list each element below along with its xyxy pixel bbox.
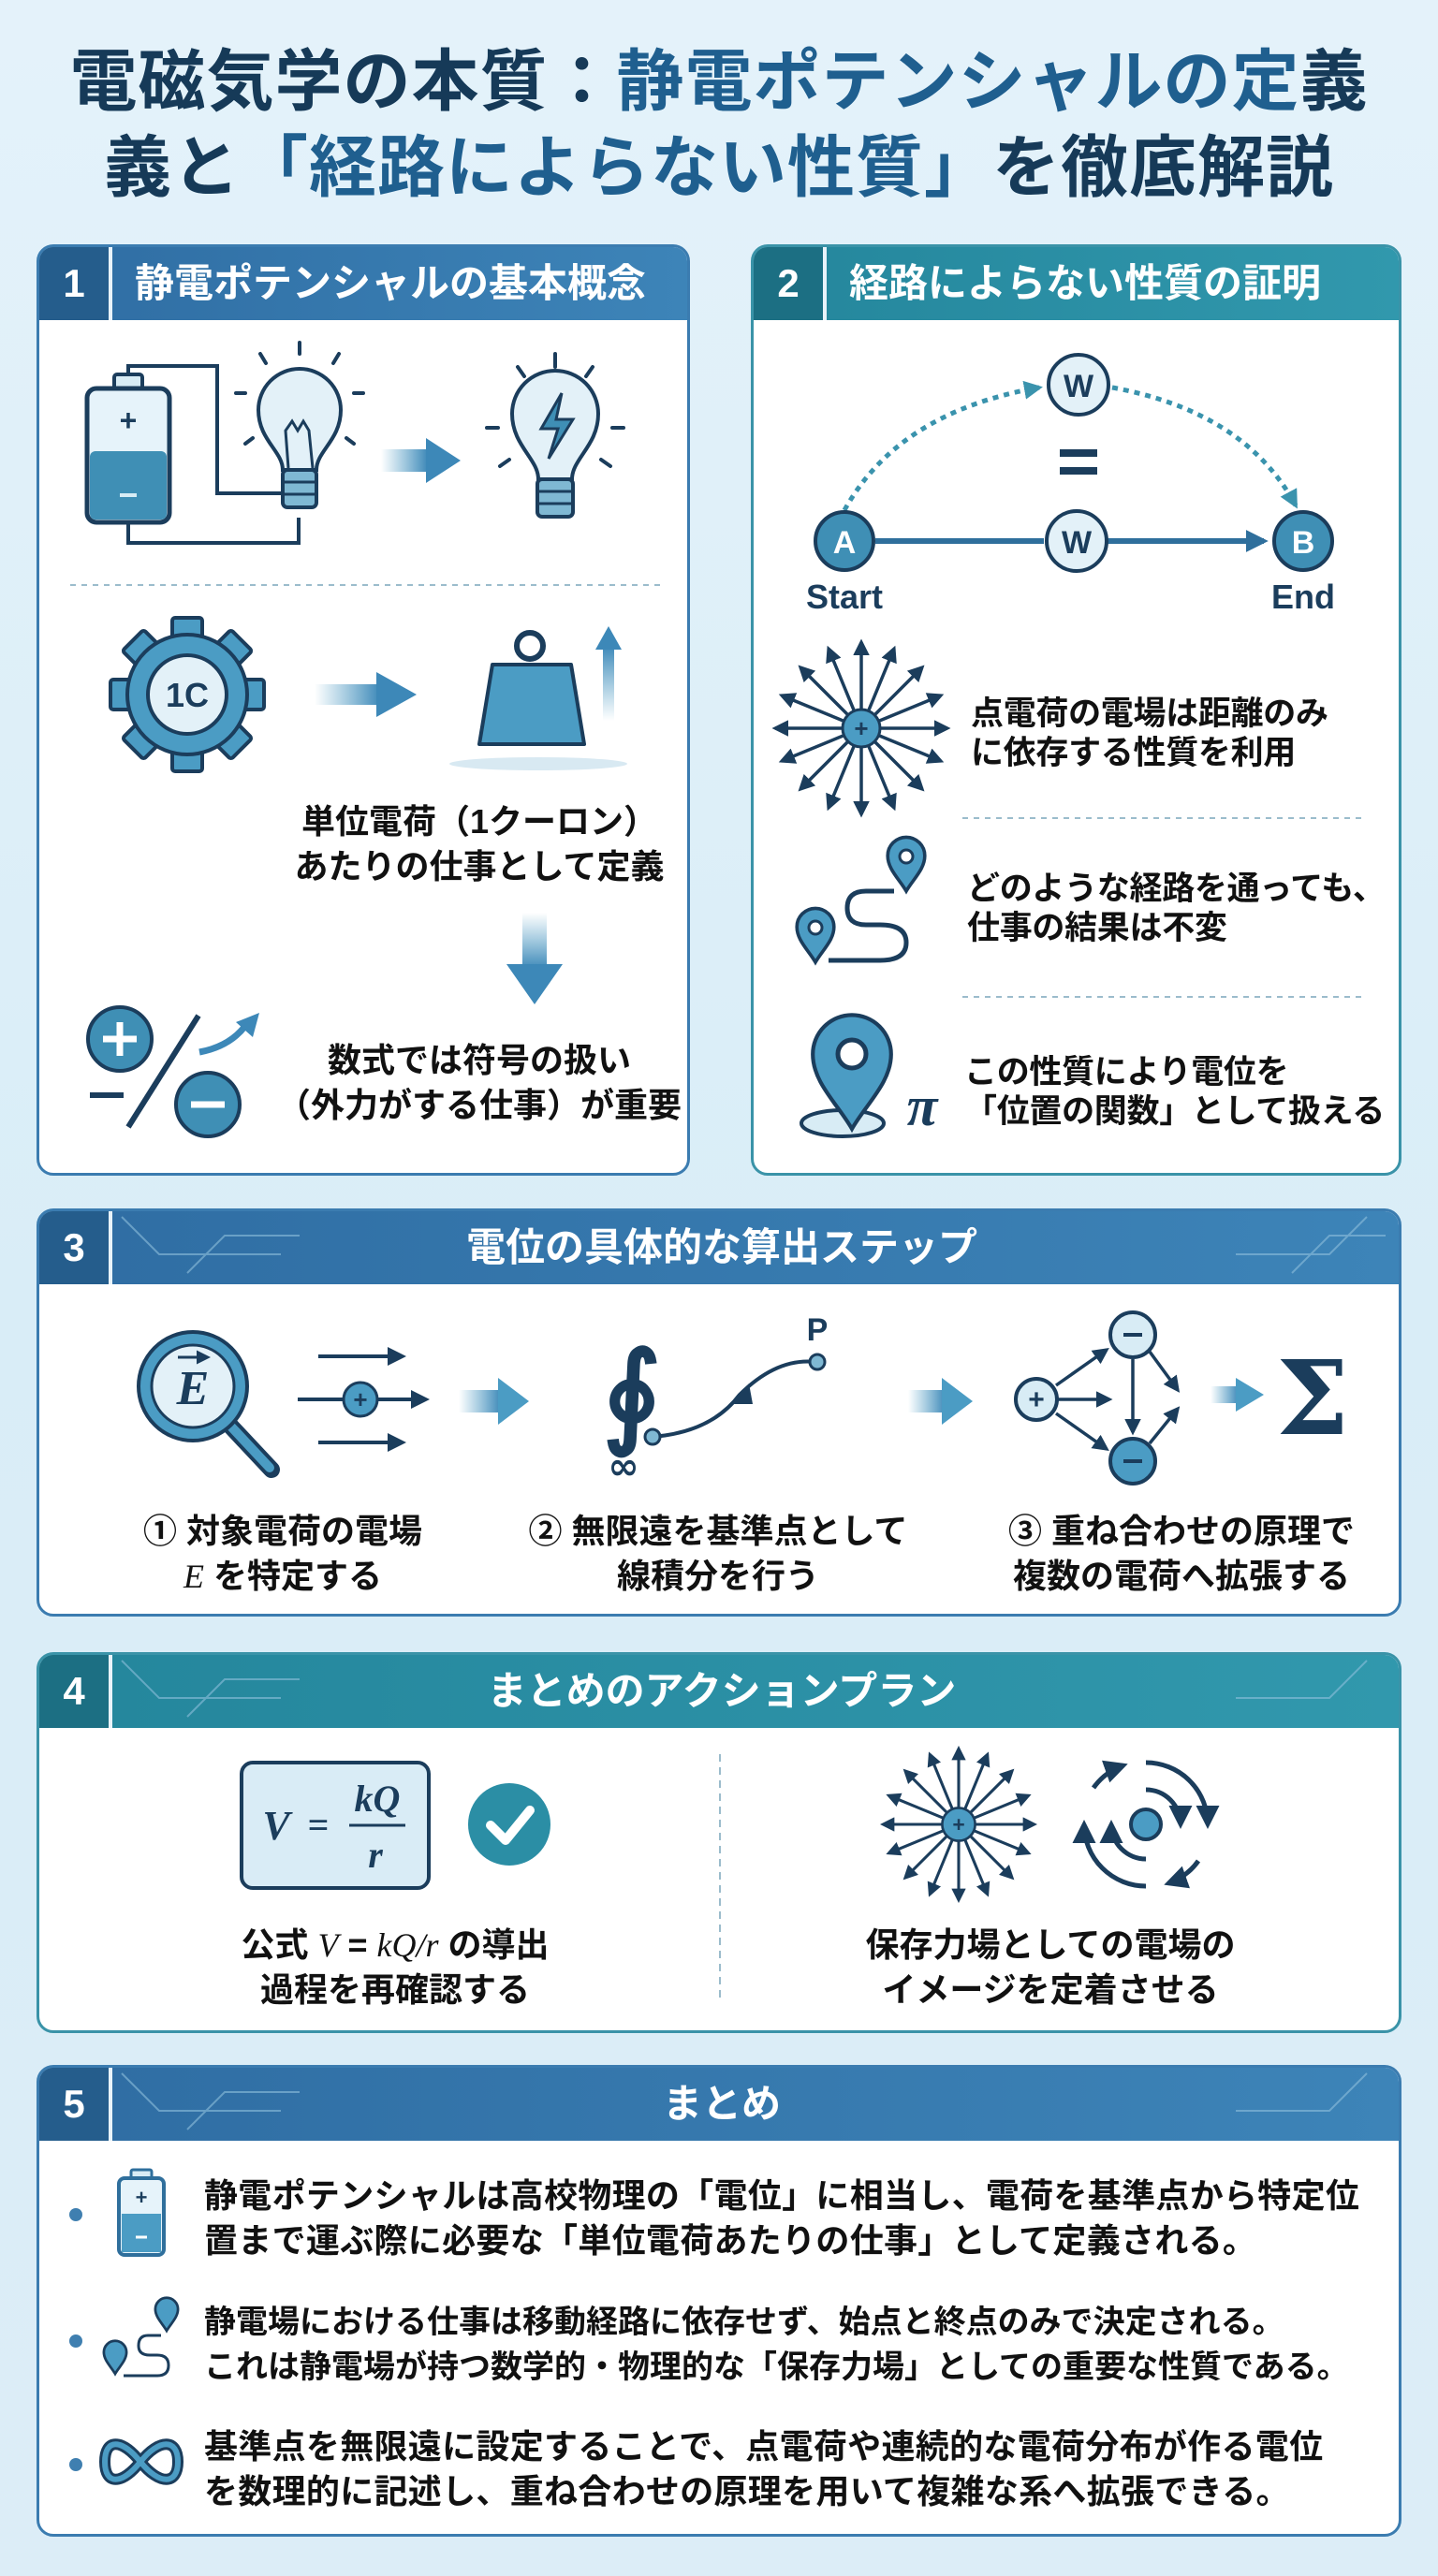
icon: field arrows with charge <box>298 1356 426 1442</box>
title: 電磁気学の本質：静電ポテンシャルの定義 <box>69 45 1369 120</box>
icon: line integral from infinity to P: ∞ <box>608 1445 639 1488</box>
summary item 1 <box>204 2176 1359 2260</box>
icon: line integral from infinity to P: ∮ <box>603 1327 661 1459</box>
icons layer: + <box>353 1385 368 1413</box>
icon: line integral from infinity to P <box>603 1312 828 1488</box>
arrow: step 2 to 3 <box>908 1378 973 1425</box>
text: point charge field <box>971 695 1328 771</box>
icon: plus minus sign <box>88 1007 259 1136</box>
text: any path: 仕事の結果は不変 <box>967 910 1227 946</box>
icon: lit bulb <box>487 354 624 517</box>
text: step 2: 線積分を行う <box>617 1557 819 1595</box>
text: formula review: 公式 V = kQ/r の導出 <box>241 1925 550 1964</box>
panel header circuits <box>122 1217 1386 2130</box>
text: conservative field image: 保存力場としての電場の <box>866 1925 1235 1964</box>
text: step 2: ② 無限遠を基準点として <box>529 1512 907 1550</box>
icon: formula box: = <box>308 1804 329 1846</box>
header 2 <box>754 247 1399 320</box>
text: sign handling: 数式では符号の扱い <box>328 1041 631 1079</box>
header 5: まとめ <box>663 2082 781 2126</box>
title: 義と「経路によらない性質」を徹底解説 <box>104 131 1334 206</box>
header 5 <box>39 2068 1399 2141</box>
text: step 1: ① 対象電荷の電場 <box>143 1512 422 1550</box>
text: point charge field: に依存する性質を利用 <box>971 735 1296 771</box>
icon: summary battery <box>119 2170 164 2255</box>
icon: summary infinity <box>105 2444 178 2480</box>
diagram: path independence A to B <box>806 355 1335 616</box>
text: step 1: E を特定する <box>183 1557 382 1595</box>
summary item 3: を数理的に記述し、重ね合わせの原理を用いて複雑な系へ拡張できる。 <box>204 2472 1290 2510</box>
panel: 2 path independence <box>751 244 1401 1176</box>
icon: battery and bulb circuit: + <box>120 403 137 437</box>
text: sign handling <box>277 1041 682 1124</box>
panel: 5 summary <box>37 2065 1401 2537</box>
header 3: 電位の具体的な算出ステップ <box>466 1225 977 1269</box>
icon: route with pins <box>797 837 925 962</box>
arrow: gear to weight <box>315 672 417 717</box>
divider <box>70 584 660 586</box>
text: conservative field image <box>866 1925 1235 2009</box>
summary item 3 <box>204 2427 1323 2510</box>
summary item 2: これは静電場が持つ数学的・物理的な「保存力場」としての重要な性質である。 <box>204 2349 1349 2385</box>
summary item 3: 基準点を無限遠に設定することで、点電荷や連続的な電荷分布が作る電位 <box>204 2427 1323 2466</box>
bullets <box>69 2208 82 2471</box>
text: step 2 <box>529 1512 907 1595</box>
icon: radial field <box>883 1749 1034 1900</box>
arrow: down <box>506 913 563 1004</box>
icon: line integral from infinity to P: P <box>807 1312 828 1348</box>
title <box>69 45 1369 206</box>
text: function of position: 「位置の関数」として扱える <box>964 1093 1385 1130</box>
text: unit charge definition <box>295 802 664 886</box>
icon: sigma: Σ <box>1276 1338 1349 1458</box>
panel: 1 basic concept <box>37 244 690 1176</box>
icon: formula box <box>242 1763 429 1888</box>
panel: 3 calculation steps <box>37 1208 1401 1617</box>
header 1 <box>39 247 687 320</box>
icon: superposition charges <box>1016 1312 1178 1484</box>
header 5: 5 <box>63 2082 85 2126</box>
text: any path: どのような経路を通っても、 <box>967 871 1386 907</box>
icon: magnifier with E <box>139 1332 271 1470</box>
text: step 1 <box>143 1512 422 1595</box>
icon: radial point charge <box>775 642 947 814</box>
icon: formula box: V <box>262 1803 293 1849</box>
text: conservative field image: イメージを定着させる <box>882 1970 1219 2009</box>
summary item 2: 静電場における仕事は移動経路に依存せず、始点と終点のみで決定される。 <box>204 2305 1284 2340</box>
icon: formula box: kQ <box>355 1778 400 1820</box>
text: function of position: この性質により電位を <box>964 1054 1288 1090</box>
text: formula review: 過程を再確認する <box>260 1970 530 2009</box>
header 2: 経路によらない性質の証明 <box>849 261 1321 305</box>
header 4 <box>39 1655 1399 1728</box>
icon: gear 1C <box>110 618 264 771</box>
icon: summary route <box>104 2298 178 2376</box>
header 1: 静電ポテンシャルの基本概念 <box>135 261 646 305</box>
icon: gear 1C: 1C <box>166 676 209 714</box>
diagram: path independence A to B: W <box>1064 369 1094 404</box>
text: sign handling: （外力がする仕事）が重要 <box>277 1086 682 1124</box>
arrow: to sigma <box>1211 1378 1264 1412</box>
diagram: path independence A to B: A <box>833 525 856 561</box>
text: step 3 <box>1008 1512 1355 1595</box>
icon: swirl field <box>1084 1763 1208 1886</box>
text: step 3: 複数の電荷へ拡張する <box>1013 1557 1350 1595</box>
header 3 <box>39 1211 1399 1284</box>
icon: pin with pi: π <box>907 1076 940 1137</box>
header 1: 1 <box>63 261 85 305</box>
text: any path <box>967 871 1386 946</box>
header 2: 2 <box>777 261 800 305</box>
header 4: 4 <box>63 1669 85 1713</box>
diagram: path independence A to B: Start <box>806 578 883 616</box>
diagram: path independence A to B: B <box>1292 525 1314 561</box>
text: formula review <box>241 1925 550 2009</box>
text: point charge field: 点電荷の電場は距離のみ <box>971 695 1328 732</box>
arrow: step 1 to 2 <box>459 1378 529 1425</box>
summary item 1: 静電ポテンシャルは高校物理の「電位」に相当し、電荷を基準点から特定位 <box>204 2176 1359 2215</box>
icon: battery and bulb circuit <box>87 343 363 543</box>
text: unit charge definition: あたりの仕事として定義 <box>295 847 664 886</box>
arrow: bulb to lit bulb <box>381 438 461 483</box>
text: function of position <box>964 1054 1385 1130</box>
header 4: まとめのアクションプラン <box>488 1669 956 1713</box>
icon: magnifier with E: E <box>176 1362 209 1415</box>
text: step 3: ③ 重ね合わせの原理で <box>1008 1512 1355 1550</box>
summary item 1: 置まで運ぶ際に必要な「単位電荷あたりの仕事」として定義される。 <box>204 2221 1256 2260</box>
icon: check mark <box>468 1783 550 1866</box>
icon: summary battery: + <box>136 2186 147 2209</box>
panel: 4 action plan <box>37 1652 1401 2033</box>
icon: formula box: r <box>368 1834 383 1876</box>
diagram: path independence A to B: End <box>1271 578 1335 616</box>
icon: weight lifted <box>449 626 627 770</box>
header 3: 3 <box>63 1225 85 1269</box>
text: unit charge definition: 単位電荷（1クーロン） <box>301 802 657 841</box>
diagram: path independence A to B: W <box>1062 525 1093 561</box>
icon: superposition charges: + <box>1028 1384 1045 1415</box>
icon: pin with pi <box>801 1015 940 1137</box>
summary item 2 <box>204 2305 1349 2385</box>
